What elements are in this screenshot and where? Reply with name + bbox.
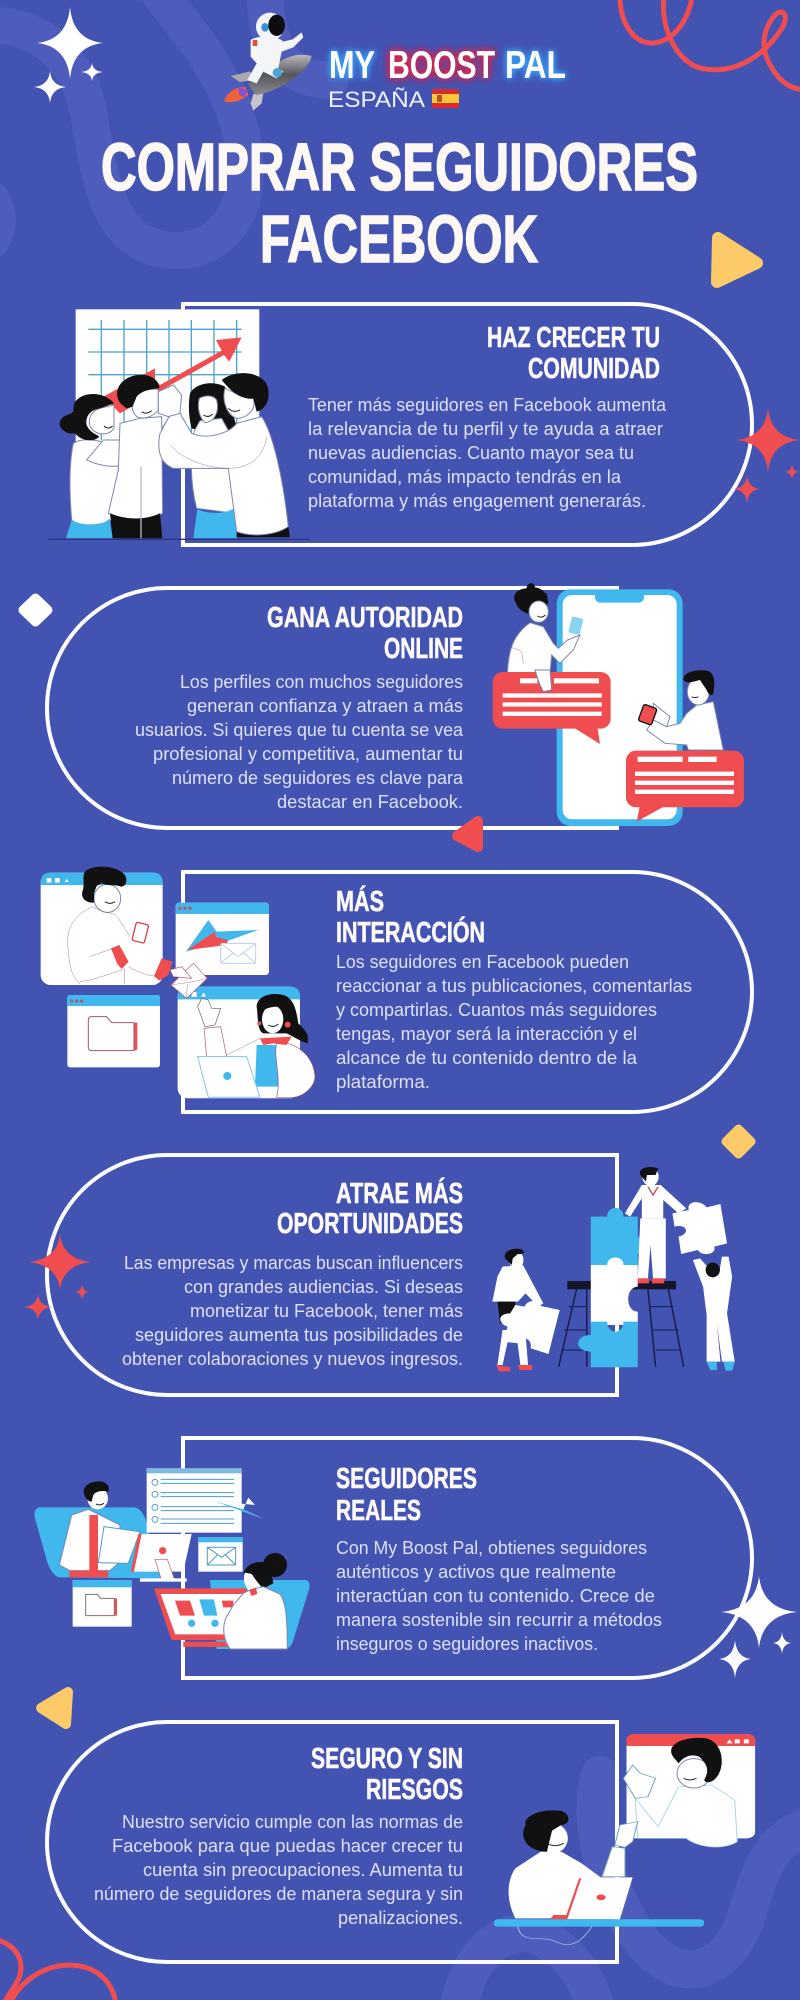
illustration: team high five with growth chart (48, 309, 310, 539)
panel frame (183, 304, 752, 545)
window: paper plane (176, 903, 269, 975)
high-five hands (158, 385, 182, 417)
yellow triangle: top right (717, 238, 757, 282)
title (101, 130, 698, 277)
icon: astronaut on rocket (224, 13, 312, 111)
illustration: video call (494, 1734, 755, 1945)
panel frame (183, 872, 752, 1112)
panel 5: seguidores reales (34, 1438, 752, 1678)
body text: Los seguidores en Facebook pueden (336, 952, 629, 972)
illustration: windows, people and messages (41, 867, 315, 1098)
phone (557, 589, 683, 826)
window: woman with laptop (178, 987, 315, 1098)
chat bubble 2 (626, 751, 744, 822)
yellow diamond (726, 1129, 751, 1154)
heading: ONLINE (384, 633, 463, 665)
body text: monetizar tu Facebook, tener más (190, 1301, 463, 1321)
checklist window (147, 1468, 242, 1533)
body text: cuenta sin preocupaciones. Aumenta tu (143, 1860, 463, 1880)
background ribbon: bottom (458, 1775, 800, 2000)
body text: número de seguidores es clave para (172, 768, 464, 788)
panel frame (183, 1438, 752, 1678)
body text (135, 672, 464, 812)
body text: con grandes audiencias. Si deseas (184, 1277, 463, 1297)
heading: MÁS (336, 884, 384, 918)
illustration: remote work screens (34, 1468, 310, 1649)
body text: Las empresas y marcas buscan influencers (124, 1253, 463, 1273)
woman at monitor (224, 1553, 287, 1649)
chart board (76, 309, 259, 443)
person 3 (189, 383, 237, 538)
heading: COMUNIDAD (528, 353, 660, 385)
red triangle (457, 821, 478, 847)
platform and ladders (559, 1281, 684, 1367)
background ribbon: top (0, 0, 330, 251)
panel frame (47, 1155, 617, 1395)
heading (311, 1743, 463, 1806)
logo subtitle: ESPAÑA (328, 87, 425, 112)
paper plane (214, 1498, 262, 1518)
sparkles: white right (719, 1576, 797, 1678)
body text: Tener más seguidores en Facebook aumenta (308, 395, 667, 415)
body text: interactúan con tu contenido. Crece de (336, 1586, 655, 1606)
body text: generan confianza y atraen a más (187, 696, 463, 716)
panel 2: gana autoridad online (47, 583, 744, 828)
red squiggle: bottom left (0, 1940, 116, 2000)
blue backdrop left (34, 1507, 162, 1578)
logo text (329, 44, 566, 87)
person 1 (60, 394, 170, 538)
body text: auténticos y activos que realmente (336, 1562, 616, 1582)
chat bubble 1 (493, 670, 611, 744)
body text: Nuestro servicio cumple con las normas de (122, 1812, 463, 1832)
woman with puzzle piece (492, 1249, 560, 1371)
window: folder (67, 995, 160, 1067)
body text: la relevancia de tu perfil y te ayuda a atraer (308, 419, 663, 439)
body text: y compartirlas. Cuantos más seguidores (336, 1000, 657, 1020)
body text: usuarios. Si quieres que tu cuenta se vea (135, 720, 464, 740)
envelope and hand (170, 963, 207, 998)
folder window (73, 1580, 132, 1627)
heading: RIESGOS (366, 1774, 463, 1806)
body text: Facebook para que puedas hacer crecer tu (112, 1836, 463, 1856)
body text: tengas, mayor será la interacción y el (336, 1024, 637, 1044)
body text: número de seguidores de manera segura y sin (94, 1884, 463, 1904)
panel 3: más interacción (41, 867, 752, 1112)
yellow triangle: left (41, 1692, 68, 1724)
body text: destacar en Facebook. (277, 792, 463, 812)
heading (487, 322, 660, 385)
body text: Con My Boost Pal, obtienes seguidores (336, 1538, 647, 1558)
woman with phone (507, 583, 583, 673)
body text: penalizaciones. (338, 1908, 463, 1928)
man on platform (625, 1167, 686, 1283)
body text: nuevas audiencias. Cuanto mayor sea tu (308, 443, 634, 463)
body text: manera sostenible sin recurrir a métodos (336, 1610, 662, 1630)
body text: obtener colaboraciones y nuevos ingresos. (122, 1349, 463, 1369)
heading: OPORTUNIDADES (277, 1208, 463, 1240)
heading (267, 602, 463, 665)
heading: SEGUIDORES (336, 1463, 477, 1495)
heading (336, 1463, 477, 1527)
icon: Spanish flag (432, 89, 459, 108)
white diamond (23, 598, 48, 622)
illustration: phone and chat bubbles (493, 583, 744, 826)
body text: profesional y competitiva, aumentar tu (153, 744, 463, 764)
logo text: PAL (505, 44, 566, 87)
blue backdrop right (210, 1580, 310, 1649)
person 2 (108, 375, 163, 538)
sparkles: red right (734, 408, 800, 503)
man with phone (638, 670, 723, 750)
heading: SEGURO Y SIN (311, 1743, 463, 1775)
sparkles: red left (24, 1234, 92, 1320)
heading (336, 884, 485, 949)
red squiggle: top right (620, 0, 800, 90)
man reaching up (693, 1257, 735, 1371)
logo text: MY (329, 44, 375, 87)
heading: REALES (336, 1495, 421, 1527)
heading: INTERACCIÓN (336, 915, 485, 949)
body text: plataforma. (336, 1072, 430, 1092)
panel frame (47, 588, 617, 828)
body text: comunidad, más impacto tendrás en la (308, 467, 622, 487)
puzzle column (578, 1208, 647, 1367)
panel frame (47, 1722, 617, 1962)
person 4 (159, 373, 290, 537)
red monitor (154, 1588, 247, 1647)
email window (198, 1537, 243, 1572)
heading: ATRAE MÁS (336, 1176, 463, 1210)
panel 4: atrae más oportunidades (47, 1155, 735, 1395)
logo text: BOOST (388, 44, 495, 87)
logo (224, 13, 566, 112)
body text (336, 1538, 662, 1654)
arrow: growth (103, 337, 242, 413)
ground line (48, 537, 310, 541)
illustration: team assembling puzzle (492, 1167, 735, 1371)
body text (336, 952, 692, 1092)
body text: seguidores aumenta tus posibilidades de (135, 1325, 463, 1345)
title: FACEBOOK (260, 202, 538, 277)
body text: Los perfiles con muchos seguidores (180, 672, 463, 692)
puzzle piece: top right (672, 1202, 727, 1254)
man with clipboard (59, 1481, 140, 1577)
body text: inseguros o seguidores inactivos. (336, 1634, 598, 1654)
person with laptop (494, 1810, 704, 1945)
body text: plataforma y más engagement generarás. (308, 491, 646, 511)
heading: HAZ CRECER TU (487, 322, 660, 354)
body text (94, 1812, 463, 1928)
body text (308, 395, 667, 511)
body text: alcance de tu contenido dentro de la (336, 1048, 638, 1068)
panel 1: haz crecer tu comunidad (48, 304, 752, 545)
video call window (623, 1734, 755, 1847)
heading: GANA AUTORIDAD (267, 602, 463, 634)
body text: reaccionar a tus publicaciones, comentarlas (336, 976, 692, 996)
body text (122, 1253, 463, 1369)
sparkles: top left (34, 7, 103, 103)
heading (277, 1176, 463, 1240)
desktop monitor (131, 1534, 192, 1582)
window: man with phone (41, 867, 173, 985)
panel 6: seguro y sin riesgos (47, 1722, 755, 1962)
